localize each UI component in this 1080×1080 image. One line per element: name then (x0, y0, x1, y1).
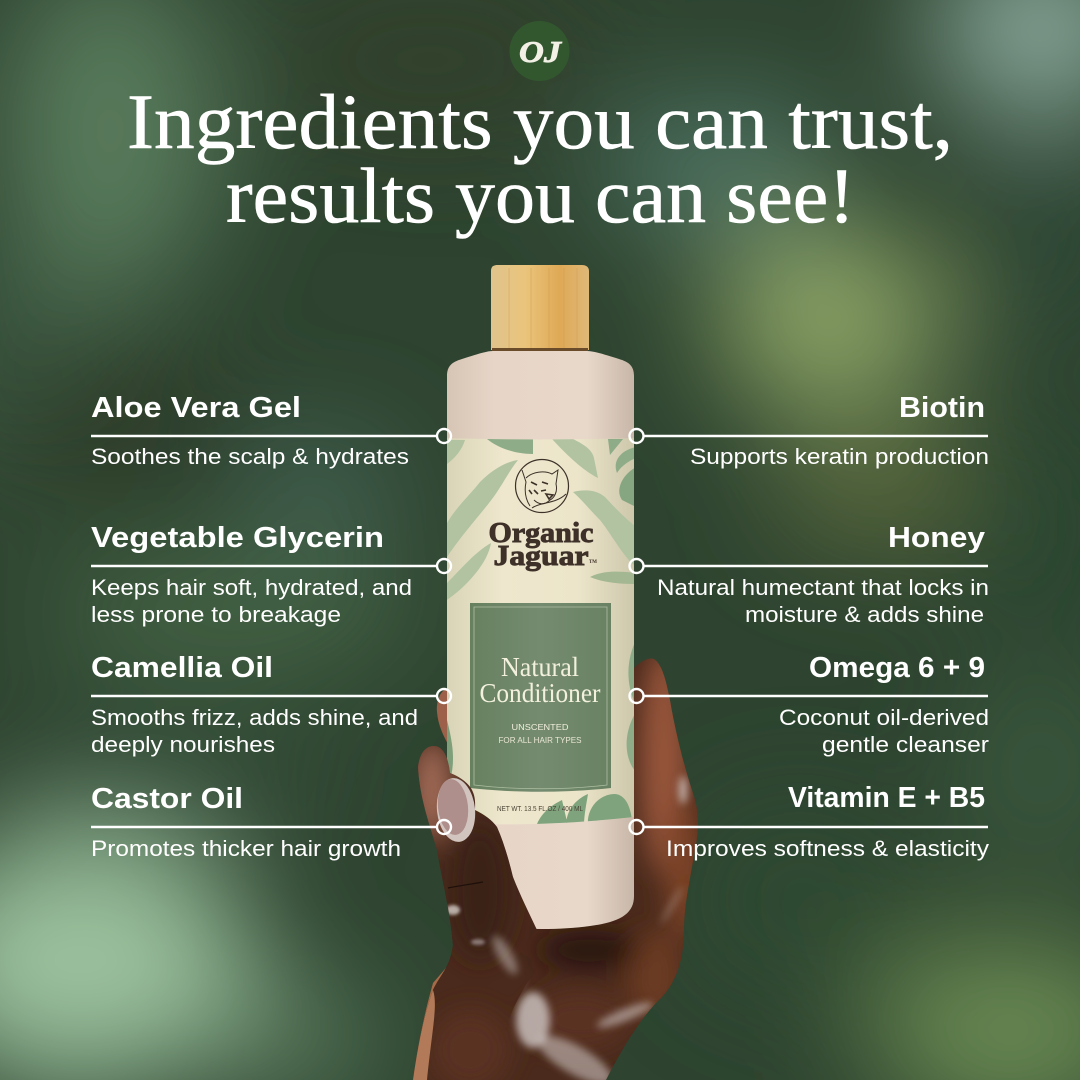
icon: OJ brand badge: OJ (519, 34, 563, 69)
ingredient: Castor Oil: Castor Oil (91, 783, 243, 815)
label leaves (447, 439, 636, 826)
ingredient: Omega 6 + 9: Coconut oil-derived (779, 705, 989, 730)
ingredient: Biotin: Supports keratin production (690, 444, 989, 469)
ingredient: Vegetable Glycerin (91, 522, 451, 627)
ingredient: Vitamin E + B5 (630, 782, 989, 861)
brand wordmark (488, 518, 597, 572)
ingredient: Castor Oil (91, 783, 451, 861)
ingredient: Castor Oil: Promotes thicker hair growth (91, 836, 401, 861)
ingredient: Omega 6 + 9: gentle cleanser (822, 732, 989, 757)
title: Ingredients you can trust, (127, 78, 953, 165)
hand holding bottle (413, 658, 698, 1080)
title (127, 78, 953, 239)
net weight: NET WT. 13.5 FL.OZ / 400 ML (497, 806, 583, 813)
brand wordmark: Jaguar (494, 541, 588, 572)
icon: OJ brand badge (510, 21, 570, 81)
ingredient: Omega 6 + 9: Omega 6 + 9 (809, 652, 985, 684)
ingredient: Camellia Oil: Smooths frizz, adds shine, and (91, 705, 418, 730)
green panel (470, 603, 611, 792)
green panel: FOR ALL HAIR TYPES (498, 735, 582, 745)
ingredient: Camellia Oil (91, 652, 451, 757)
ingredient: Aloe Vera Gel (91, 392, 451, 469)
brand wordmark: TM (589, 560, 597, 565)
bottle body (447, 351, 634, 929)
ingredient: Camellia Oil: deeply nourishes (91, 732, 275, 757)
green panel: UNSCENTED (512, 722, 568, 732)
ingredient: Vegetable Glycerin: Keeps hair soft, hydrated, and (91, 575, 412, 600)
ingredient: Honey: Honey (888, 522, 985, 554)
ingredient: Camellia Oil: Camellia Oil (91, 652, 273, 684)
ingredient: Vegetable Glycerin: less prone to breakage (91, 602, 341, 627)
ingredient: Aloe Vera Gel: Aloe Vera Gel (91, 392, 301, 424)
ingredient: Honey: moisture & adds shine (745, 602, 984, 627)
thumb over bottle (400, 640, 720, 1080)
logo: jaguar (516, 460, 568, 512)
ingredient: Aloe Vera Gel: Soothes the scalp & hydrates (91, 444, 409, 469)
thumb nail (434, 776, 478, 844)
brand wordmark: Organic (488, 518, 594, 549)
ingredient: Biotin (630, 392, 989, 469)
bottle label (447, 438, 636, 826)
ingredient: Omega 6 + 9 (630, 652, 989, 757)
ingredient: Vitamin E + B5: Vitamin E + B5 (788, 782, 985, 814)
ingredient: Vitamin E + B5: Improves softness & elasticity (666, 836, 989, 861)
green panel: Conditioner (480, 678, 600, 708)
bottle (447, 265, 636, 929)
title: results you can see! (226, 152, 855, 239)
ingredient: Honey: Natural humectant that locks in (657, 575, 989, 600)
foam highlights (510, 773, 692, 1080)
ingredient: Vegetable Glycerin: Vegetable Glycerin (91, 522, 384, 554)
ingredient: Honey (630, 522, 989, 627)
green panel: Natural (501, 652, 579, 682)
bottle cap (491, 265, 589, 351)
ingredient: Biotin: Biotin (899, 392, 985, 424)
